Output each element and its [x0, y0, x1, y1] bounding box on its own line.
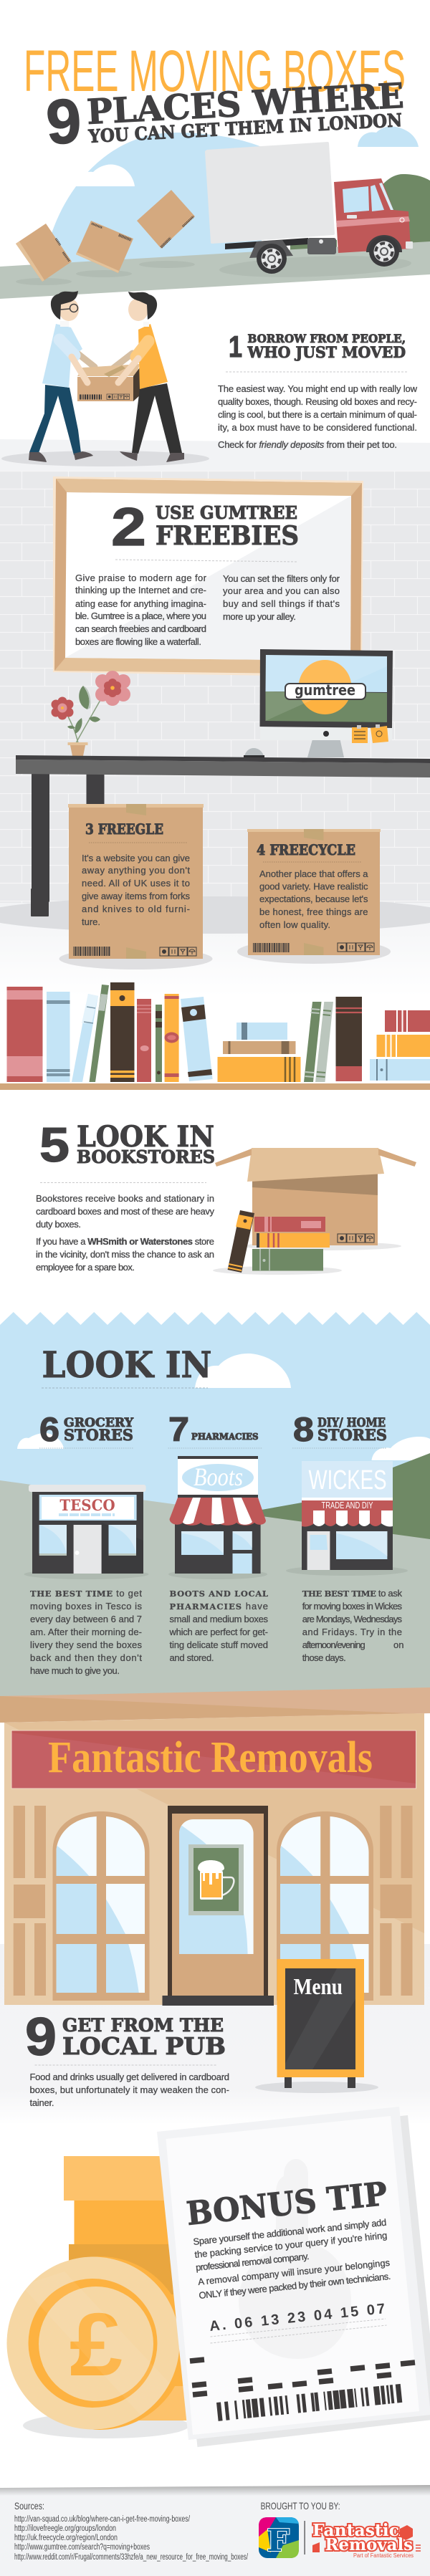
- text: step 2 right column: buy and sell things if that's: [223, 598, 340, 609]
- text: step 6: have much to give you.: [30, 1665, 120, 1676]
- book: [89, 985, 109, 1082]
- store: Tesco: [24, 1485, 149, 1579]
- beer poster: [188, 1844, 244, 1915]
- awning: [302, 1510, 393, 1527]
- flowers in pot: [52, 671, 130, 756]
- store sign: TRADE AND DIY: [321, 1500, 373, 1510]
- subtitle: PLACES WHERE: [86, 76, 405, 133]
- text: step 1: ity, a box must have to be considered functional.: [218, 422, 417, 433]
- bookshelf: [0, 982, 430, 1090]
- awning: [169, 1498, 266, 1526]
- heading: step 6: 6: [39, 1410, 59, 1448]
- text: step 5: If you have a WHSmith or Waterstones store: [36, 1236, 214, 1247]
- text: step 6: [30, 1588, 142, 1676]
- text: step 2 left column: ating ease for anything imagina-: [75, 598, 206, 609]
- subtitle: 9: [44, 85, 83, 158]
- text: step 1: quality boxes, though. Reusing old boxes and recy-: [218, 396, 417, 407]
- desk leg foot: [31, 889, 49, 916]
- heading: step 2: FREEBIES: [156, 521, 299, 551]
- text: step 5: employee for a spare box.: [36, 1262, 135, 1273]
- panel: step 2 frame: [53, 477, 363, 677]
- heading: step 8: STORES: [317, 1426, 387, 1444]
- book: [181, 997, 213, 1081]
- text: step 2 left column: Give praise to modern age for: [75, 573, 207, 583]
- sources: [14, 2500, 249, 2562]
- text: step 6: back and then they don't: [30, 1652, 142, 1663]
- text: step 9: boxes, but unfortunately it may weaken the con-: [30, 2084, 229, 2095]
- text: step 5: in the vicinity, don't miss the chance to ask an: [36, 1249, 214, 1260]
- text: step 3: need. All of UK uses it to: [82, 878, 190, 889]
- book: [165, 994, 179, 1082]
- heading: step 7: 7: [168, 1410, 189, 1448]
- sources: http://www.gumtree.com/search?q=moving+boxes: [14, 2543, 150, 2552]
- heading: step 6: STORES: [64, 1426, 133, 1444]
- logo: Fantastic Removals: [312, 2521, 421, 2559]
- text: bonus tip: A removal company will insure your belongings: [197, 2257, 391, 2287]
- heading: step 9: [25, 2006, 226, 2067]
- window: right: [274, 1809, 374, 2003]
- book: [110, 982, 135, 1082]
- heading: step 1: BORROW FROM PEOPLE,: [248, 332, 406, 345]
- far arms: [77, 353, 133, 373]
- store sign: [178, 1456, 258, 1498]
- text: step 1: [218, 383, 418, 450]
- text: step 2 left column: [75, 573, 207, 647]
- near arm: left person: [59, 340, 75, 355]
- store: Wickes: [286, 1461, 408, 1576]
- text: bonus tip: Spare yourself the additional work and simply add: [193, 2217, 387, 2247]
- book: [335, 997, 362, 1081]
- logo: Fantastic Removals: Fantastic: [312, 2521, 399, 2540]
- text: step 2 left column: ble. Gumtree is a place, where you: [75, 611, 206, 621]
- text: step 5: cardboard boxes and most of these are heavy: [36, 1206, 215, 1217]
- person: right: [118, 292, 184, 462]
- store sign: WICKES: [308, 1465, 387, 1495]
- heading: step 5: BOOKSTORES: [77, 1146, 215, 1167]
- text: step 5: duty boxes.: [36, 1219, 81, 1230]
- window: left: [50, 1809, 150, 2003]
- floor: [0, 903, 430, 996]
- footer: [0, 2485, 430, 2576]
- heading: step 1: WHO JUST MOVED: [247, 343, 406, 361]
- barcode: [73, 947, 110, 956]
- text: bonus tip: ONLY if they were packed by their own technicians.: [199, 2271, 391, 2301]
- text: bonus tip: professional removal company.: [195, 2251, 310, 2273]
- text: step 3: give away items from forks: [82, 891, 191, 901]
- text: step 1: The easiest way. You might end up with really low: [218, 383, 418, 394]
- text: step 7: ting delicate stuff moved: [169, 1639, 268, 1650]
- pot: [67, 742, 87, 745]
- icon: hand watermark: [239, 2159, 351, 2359]
- package icons: [338, 943, 374, 952]
- store: Tesco: TESCO: [59, 1496, 115, 1514]
- text: step 8: for moving boxes in Wickes: [302, 1601, 403, 1612]
- leaning book: [228, 1210, 254, 1273]
- ground: [0, 1480, 430, 1698]
- text: step 6: THE BEST TIME to get: [30, 1588, 142, 1599]
- text: step 4: be honest, free things are: [259, 906, 368, 917]
- book: [156, 1005, 162, 1082]
- hill: [290, 174, 430, 259]
- carried box: [77, 364, 141, 401]
- book: [315, 1002, 333, 1082]
- text: step 3: away anything you don't: [82, 865, 190, 876]
- heading: step 2: [111, 497, 299, 557]
- logo: F app icon: [259, 2517, 299, 2558]
- mouse: [244, 748, 264, 757]
- menu board: Menu: [294, 1973, 343, 1999]
- box: falling 3: [137, 190, 195, 249]
- panel: step 3 box: [59, 804, 212, 969]
- brick wall: [0, 471, 430, 903]
- logo: gumtree: gumtree: [295, 681, 355, 699]
- icon: pound coin: [7, 2256, 186, 2430]
- store sign: [302, 1461, 393, 1510]
- box: falling 1: [16, 224, 72, 282]
- text: step 2 left column: boxes are flowing like a waterfall.: [75, 636, 201, 647]
- bonus: orange box stack: [23, 2156, 189, 2438]
- sticky notes: [352, 724, 388, 743]
- text: step 9: [30, 2072, 229, 2108]
- text: step 9: tainer.: [30, 2097, 54, 2108]
- sources: Sources:: [14, 2500, 44, 2512]
- heading: step 2: USE GUMTREE: [156, 502, 297, 523]
- paper: bonus tip: [157, 2107, 430, 2447]
- text: step 4: good variety. Have realistic: [259, 881, 368, 891]
- text: step 7: and stored.: [169, 1652, 214, 1663]
- menu board: [255, 1959, 378, 2093]
- heading: step 8: DIY/ HOME: [317, 1416, 386, 1430]
- text: step 7: which are perfect for get-: [169, 1627, 268, 1637]
- cloud: [17, 1433, 64, 1449]
- book: [7, 987, 43, 1082]
- book stack right: [370, 1010, 430, 1081]
- panel: step 4 box: [237, 829, 391, 964]
- text: step 2 left column: can search freebies and cardboard: [75, 623, 206, 634]
- text: step 2 right column: You can set the filters only for: [223, 573, 340, 584]
- truck cab: [334, 178, 411, 253]
- desk shadow: [0, 896, 430, 934]
- package icons: [160, 947, 196, 956]
- text: step 6: moving boxes in Tesco is: [30, 1601, 142, 1612]
- heading: step 6: GROCERY: [64, 1416, 134, 1430]
- text: step 7: small and medium boxes: [169, 1614, 268, 1624]
- text: step 2 left column: thinking up the Internet and cre-: [75, 585, 206, 595]
- sources: http://van-squad.co.uk/blog/where-can-i-get-free-moving-boxes/: [14, 2515, 191, 2524]
- text: step 5: Bookstores receive books and stationary in: [36, 1193, 214, 1204]
- heading: step 1: [229, 330, 406, 363]
- logo: F app icon: F: [267, 2523, 290, 2558]
- heading: step 6: [39, 1410, 134, 1448]
- text: step 3: [82, 853, 191, 927]
- text: step 7: BOOTS AND LOCAL: [169, 1589, 268, 1599]
- cloud: [195, 1354, 291, 1388]
- heading: step 9: 9: [25, 2006, 57, 2067]
- barcode: [216, 2384, 402, 2421]
- heading: step 9: LOCAL PUB: [62, 2032, 226, 2060]
- book stack: [218, 1023, 301, 1082]
- heading: step 8: [293, 1410, 387, 1448]
- text: step 8: are Mondays, Wednesdays: [302, 1614, 403, 1624]
- person: left: [29, 291, 93, 462]
- text: step 8: on: [393, 1639, 403, 1650]
- text: bonus tip: the packing service to your query if you're hiring: [194, 2230, 388, 2260]
- cloud: blue: [358, 126, 419, 147]
- logo: Fantastic Removals: Part of Fantastic Services: [353, 2552, 414, 2559]
- text: step 4: expectations, because let's: [259, 894, 368, 904]
- text: step 6: every day between 6 and 7: [30, 1614, 142, 1624]
- logo: Fantastic Removals: Removals: [325, 2535, 413, 2555]
- truck box body: [205, 142, 335, 244]
- text: step 7: PHARMACIES have: [169, 1601, 268, 1612]
- heading: step 5: LOOK IN: [77, 1120, 214, 1154]
- text: step 2 right column: [223, 573, 340, 622]
- text: step 4: Another place that offers a: [259, 868, 368, 879]
- heading: step 5: [39, 1118, 215, 1172]
- road: tan: [0, 1687, 430, 1723]
- text: bonus tip: [193, 2217, 391, 2301]
- floor strip: [0, 439, 430, 474]
- text: step 8: and Fridays. Try in the: [302, 1627, 402, 1637]
- store sign: Boots: [194, 1462, 243, 1491]
- monitor: gumtree: [259, 649, 393, 757]
- pub building: [4, 1713, 424, 2006]
- text: step 2 right column: your area and you can also: [223, 585, 340, 596]
- pub sign: Fantastic Removals: [48, 1733, 373, 1782]
- desk: [16, 755, 430, 916]
- book: [72, 994, 98, 1082]
- hill: green: [262, 1453, 430, 1548]
- header sky and dome: [44, 133, 262, 267]
- text: step 6: livery they send the boxes: [30, 1639, 142, 1650]
- text: step 7: [169, 1589, 268, 1663]
- text: step 3: ture.: [82, 916, 100, 927]
- text: step 1: Check for friendly deposits from their pet too.: [218, 439, 397, 450]
- text: step 5: [36, 1193, 215, 1273]
- text: step 3: It's a website you can give: [82, 853, 190, 863]
- serial number: A. 06 13 23 04 15 07: [209, 2301, 386, 2335]
- brought to you by: BROUGHT TO YOU BY:: [261, 2500, 340, 2512]
- pilasters: [14, 1806, 412, 1996]
- heading: step 5: 5: [39, 1118, 70, 1172]
- heading: step 7: PHARMACIES: [191, 1431, 258, 1442]
- heading: step 7: [168, 1410, 258, 1448]
- icon: pound coin: £: [70, 2295, 123, 2395]
- subtitle: [44, 76, 405, 158]
- heading: step 9: GET FROM THE: [62, 2015, 224, 2036]
- text: step 8: afternoon/evening: [302, 1639, 366, 1650]
- store: Boots: [168, 1456, 267, 1579]
- sources: http://www.reddit.com/r/Frugal/comments/33hzfe/a_new_resource_for_free_moving_boxes/: [14, 2553, 249, 2562]
- text: step 9: Food and drinks usually get delivered in cardboard: [30, 2072, 229, 2082]
- subtitle: YOU CAN GET THEM IN LONDON: [87, 110, 403, 147]
- illustration: two people carrying box: [1, 291, 209, 466]
- text: step 3: and knives to old furni-: [82, 904, 190, 914]
- sky with zigzag edge: [0, 1312, 430, 1576]
- text: step 6: am. After their morning de-: [30, 1627, 142, 1637]
- barcode: [253, 943, 290, 952]
- cloud: white: [75, 164, 135, 186]
- book: [137, 999, 151, 1082]
- truck: [205, 142, 413, 274]
- package icons: [338, 1234, 374, 1242]
- open box with books: [213, 1148, 416, 1275]
- box: falling 2: [76, 221, 133, 273]
- text: step 4: often low quality.: [259, 919, 330, 930]
- book stack: [252, 1217, 330, 1271]
- text: step 8: THE BEST TIME to ask: [302, 1588, 403, 1599]
- pub door: [162, 1806, 274, 2006]
- divider: [304, 2521, 305, 2555]
- text: step 8: [302, 1588, 403, 1663]
- heading: bonus tip: BONUS TIP: [185, 2175, 389, 2233]
- floor: pub: [0, 1944, 430, 2125]
- sources: http://ilovefreegle.org/groups/london: [14, 2524, 116, 2533]
- book: [304, 1002, 321, 1082]
- book: [47, 992, 70, 1082]
- cloud: [371, 1437, 430, 1460]
- heading: look in: LOOK IN: [42, 1344, 212, 1386]
- heading: step 1: 1: [229, 330, 242, 363]
- text: step 4: [259, 868, 368, 930]
- heading: step 8: 8: [293, 1410, 314, 1448]
- heading: step 4: 4 FREECYCLE: [257, 841, 355, 858]
- text: step 1: cling is cool, but there is a certain minimum of qual-: [218, 409, 417, 420]
- road: [0, 241, 430, 299]
- text: step 8: those days.: [302, 1652, 346, 1663]
- heading: step 2: 2: [111, 497, 146, 557]
- heading: step 3: 3 FREEGLE: [85, 820, 163, 838]
- text: step 2 right column: more up your alley.: [223, 611, 296, 622]
- sources: http://uk.freecycle.org/region/London: [14, 2534, 118, 2542]
- code marks: [190, 2360, 415, 2395]
